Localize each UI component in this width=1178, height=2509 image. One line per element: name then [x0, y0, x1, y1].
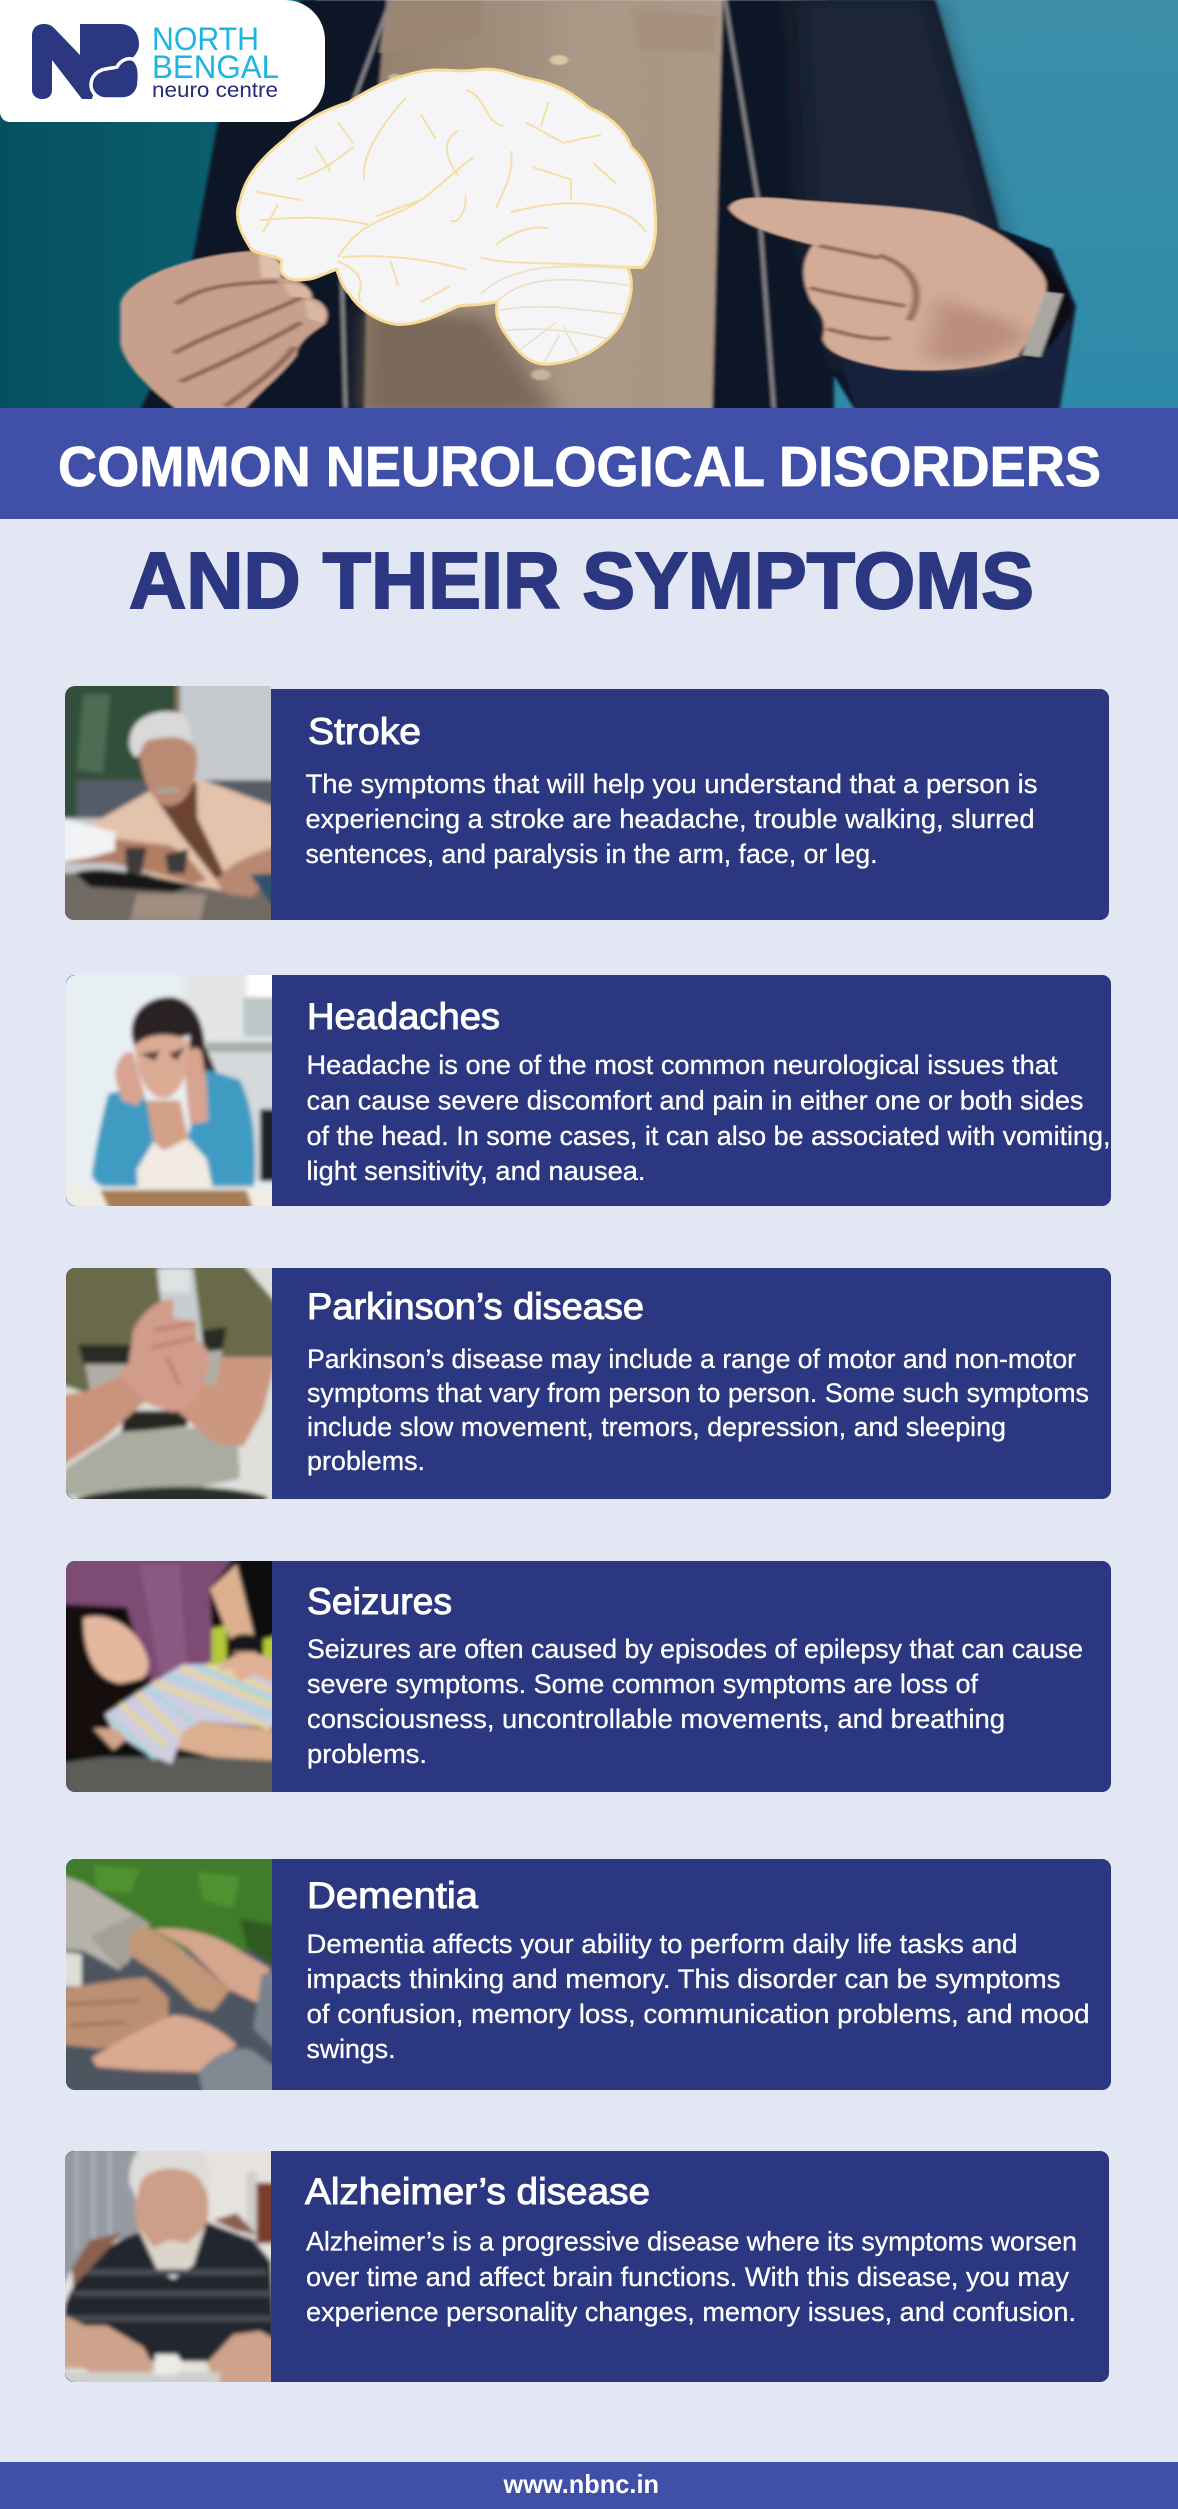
photo: stroke patient	[65, 686, 271, 920]
body text: Seizures are often caused by episodes of epilepsy that can cause	[307, 1634, 1083, 1664]
body text: can cause severe discomfort and pain in either one or both sides	[306, 1086, 1084, 1116]
body text: Dementia affects your ability to perform daily life tasks and	[306, 1929, 1018, 1959]
photo: trembling hands holding glass	[66, 1268, 272, 1499]
logo mark: NB with heart	[32, 24, 139, 99]
panel: alzheimer's disease	[53, 2144, 1109, 2390]
body text: symptoms that vary from person to person. Some such symptoms	[307, 1378, 1089, 1408]
body text: experience personality changes, memory issues, and confusion.	[306, 2297, 1076, 2327]
body text: include slow movement, tremors, depression, and sleeping	[307, 1412, 1006, 1442]
paper brain cut-out	[237, 69, 656, 364]
heading: Stroke	[308, 711, 421, 752]
hero photo: man holding paper brain	[0, 0, 1178, 412]
panel: stroke	[53, 677, 1109, 928]
logo panel	[0, 0, 325, 122]
body text: swings.	[306, 2034, 396, 2064]
heading: Seizures	[307, 1581, 452, 1622]
body text: over time and affect brain functions. With this disease, you may	[306, 2262, 1069, 2292]
body text: Headache is one of the most common neurological issues that	[306, 1050, 1058, 1080]
logo text: neuro centre	[152, 79, 278, 102]
heading: Parkinson’s disease	[307, 1286, 644, 1327]
body text	[306, 2226, 1077, 2327]
panel: dementia	[53, 1851, 1111, 2097]
body text: Parkinson’s disease may include a range of motor and non-motor	[307, 1344, 1076, 1374]
body text: of the head. In some cases, it can also be associated with vomiting,	[306, 1121, 1110, 1151]
footer bar	[0, 2462, 1178, 2509]
body text	[307, 1634, 1083, 1769]
body text: light sensitivity, and nausea.	[306, 1156, 646, 1186]
logo text	[154, 27, 278, 97]
body text: The symptoms that will help you understand that a person is	[306, 769, 1038, 799]
title line two: AND THEIR SYMPTOMS	[129, 536, 1034, 625]
panel: seizures	[53, 1554, 1111, 1800]
body text	[306, 769, 1038, 869]
body text: consciousness, uncontrollable movements, and breathing	[307, 1704, 1005, 1734]
logo text: NORTH	[152, 21, 259, 57]
body text: of confusion, memory loss, communication problems, and mood	[306, 1999, 1090, 2029]
body text	[307, 1344, 1089, 1476]
panel: headaches	[53, 966, 1111, 1214]
body text: Alzheimer’s is a progressive disease where its symptoms worsen	[306, 2226, 1077, 2256]
logo text: BENGAL	[152, 49, 279, 85]
body text	[306, 1929, 1090, 2064]
panel: parkinson's disease	[53, 1261, 1111, 1507]
body text	[306, 1050, 1110, 1186]
heading: Headaches	[307, 996, 500, 1037]
heading: Alzheimer’s disease	[305, 2171, 650, 2212]
title line one: COMMON NEUROLOGICAL DISORDERS	[58, 435, 1101, 499]
photo: woman with headache	[66, 975, 272, 1206]
body text: problems.	[307, 1446, 425, 1476]
body text: severe symptoms. Some common symptoms are loss of	[307, 1669, 978, 1699]
title banner	[0, 408, 1178, 519]
body text: sentences, and paralysis in the arm, face, or leg.	[306, 839, 878, 869]
photo: elderly man with puzzle	[65, 2151, 271, 2382]
website url: www.nbnc.in	[503, 2469, 659, 2499]
body text: experiencing a stroke are headache, trouble walking, slurred	[306, 804, 1034, 834]
body text: impacts thinking and memory. This disorder can be symptoms	[306, 1964, 1060, 1994]
photo: child having a seizure	[66, 1561, 272, 1792]
body text: problems.	[307, 1739, 427, 1769]
heading: Dementia	[307, 1875, 478, 1916]
photo: holding elderly hands	[66, 1859, 272, 2090]
